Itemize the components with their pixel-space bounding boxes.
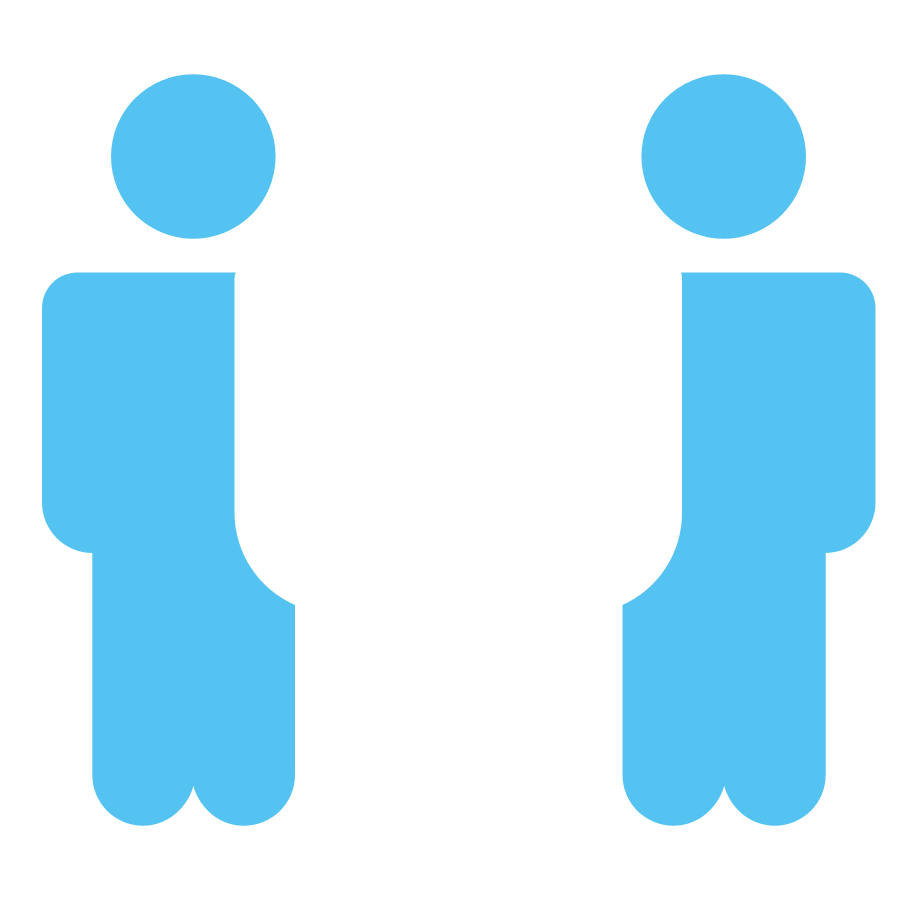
right person head (641, 74, 806, 239)
left person body (42, 272, 295, 826)
left person head (111, 74, 276, 239)
icon: right person (622, 74, 876, 826)
icon: left person (42, 74, 295, 826)
right person body (622, 272, 876, 826)
